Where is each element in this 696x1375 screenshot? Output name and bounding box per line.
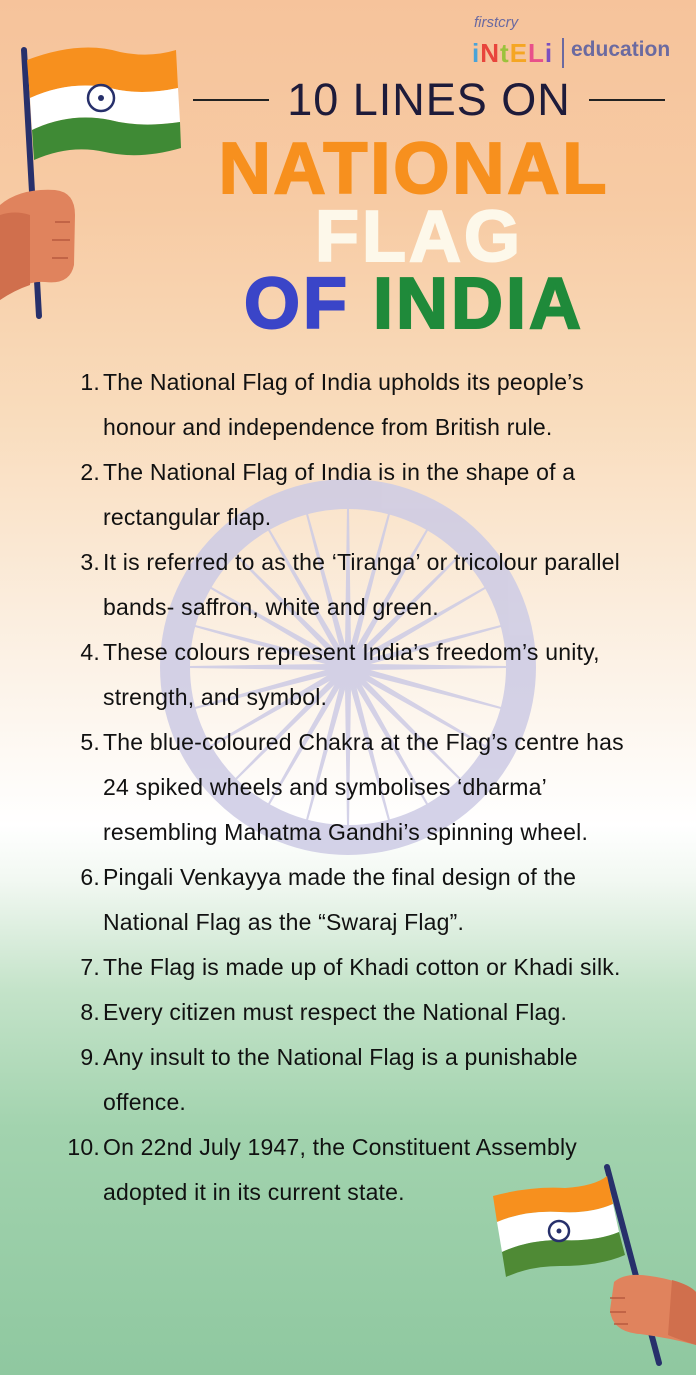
item 8: Every citizen must respect the National Flag. [103, 999, 567, 1025]
item 10 [67, 1134, 577, 1205]
item 5 [80, 729, 624, 845]
subtitle: 10 lines on: 10 LINES ON [287, 74, 571, 125]
list: 10 lines [67, 369, 624, 1205]
item 4 [80, 639, 600, 710]
item 1 [80, 369, 584, 440]
heading: flag: FLAG [315, 197, 523, 277]
item 6 [80, 864, 576, 935]
logo: iNtELi [472, 38, 553, 68]
item 1: 1. [80, 369, 100, 395]
item 9: Any insult to the National Flag is a punishable [103, 1044, 578, 1070]
logo: education [571, 38, 670, 61]
item 10: On 22nd July 1947, the Constituent Assembly [103, 1134, 577, 1160]
heading: national: NATIONAL [219, 129, 609, 209]
logo [472, 14, 670, 68]
item 6: Pingali Venkayya made the final design of the [103, 864, 576, 890]
item 6: National Flag as the “Swaraj Flag”. [103, 909, 464, 935]
item 2: rectangular flap. [103, 504, 271, 530]
item 4: 4. [80, 639, 100, 665]
item 5: 24 spiked wheels and symbolises ‘dharma’ [103, 774, 547, 800]
item 2: The National Flag of India is in the shape of a [103, 459, 575, 485]
illustration: bottom-right flag with hand [493, 1164, 696, 1366]
item 8: 8. [80, 999, 100, 1025]
item 3: It is referred to as the ‘Tiranga’ or tricolour parallel [103, 549, 620, 575]
item 6: 6. [80, 864, 100, 890]
item 5: 5. [80, 729, 100, 755]
illustration: top-left flag with hand [0, 47, 181, 319]
item 4: strength, and symbol. [103, 684, 327, 710]
item 4: These colours represent India’s freedom’s unity, [103, 639, 600, 665]
watermark: ashoka chakra [160, 479, 536, 855]
item 3: bands- saffron, white and green. [103, 594, 439, 620]
title [193, 74, 665, 344]
item 2 [80, 459, 576, 530]
item 9 [80, 1044, 578, 1115]
item 3 [80, 549, 620, 620]
item 9: 9. [80, 1044, 100, 1070]
item 7: 7. [80, 954, 100, 980]
item 3: 3. [80, 549, 100, 575]
item 9: offence. [103, 1089, 186, 1115]
item 10: adopted it in its current state. [103, 1179, 405, 1205]
logo: firstcry [474, 14, 518, 31]
item 1: honour and independence from British rule. [103, 414, 553, 440]
item 1: The National Flag of India upholds its people’s [103, 369, 584, 395]
heading: of india: OF INDIA [244, 264, 584, 344]
item 2: 2. [80, 459, 100, 485]
item 5: resembling Mahatma Gandhi’s spinning wheel. [103, 819, 588, 845]
item 5: The blue-coloured Chakra at the Flag’s centre has [103, 729, 624, 755]
item 7: The Flag is made up of Khadi cotton or Khadi silk. [103, 954, 621, 980]
item 10: 10. [67, 1134, 100, 1160]
